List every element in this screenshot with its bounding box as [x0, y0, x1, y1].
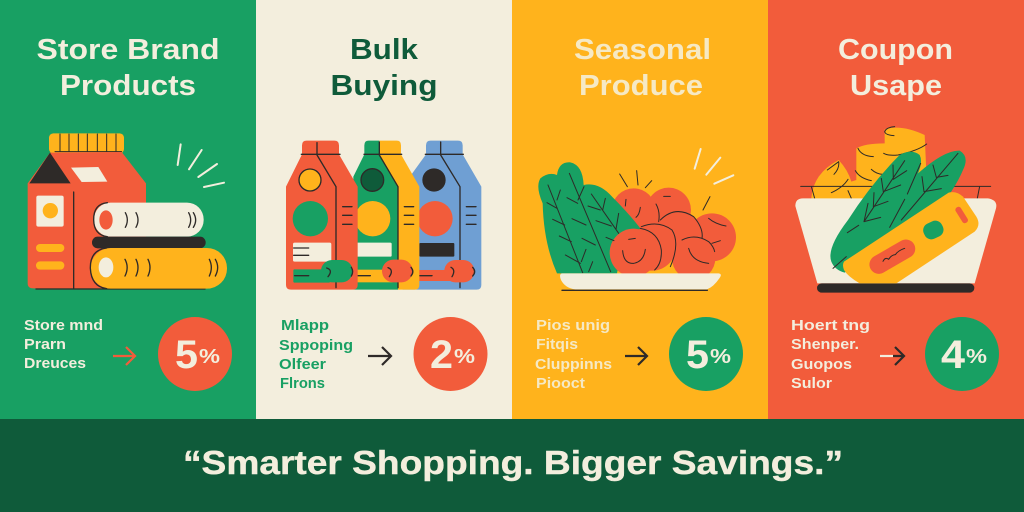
body text: seasonal produce: Cluppinns	[535, 357, 612, 373]
arrow	[625, 347, 647, 365]
panel: coupon usage	[768, 0, 1024, 419]
heading: store brand products: Products	[60, 70, 196, 102]
body text: coupon usage: Shenper.	[791, 337, 859, 353]
panel: bulk buying	[256, 0, 512, 419]
heading: store brand products	[36, 34, 220, 102]
heading: coupon usage: Usape	[850, 70, 942, 102]
red carton	[286, 141, 358, 290]
arrow	[368, 347, 391, 365]
body text: seasonal produce	[535, 318, 612, 392]
body text: store brand: Dreuces	[24, 356, 86, 372]
stat: 5%: %	[199, 346, 220, 368]
heading: seasonal produce: Seasonal	[574, 34, 711, 66]
heading: bulk buying: Bulk	[350, 34, 418, 66]
heading: seasonal produce	[574, 34, 711, 102]
stat: 5%	[158, 317, 232, 391]
body text: bulk buying: Sppoping	[279, 338, 353, 354]
heading: bulk buying	[330, 34, 438, 102]
stat: 4%: %	[966, 346, 987, 368]
stat: 5%: %	[710, 346, 731, 368]
stat: 2%: %	[454, 346, 475, 368]
body text: coupon usage: Hoert tng	[791, 318, 870, 334]
body text: coupon usage	[791, 318, 870, 392]
body text: store brand: Store mnd	[24, 318, 103, 334]
body text: store brand	[24, 318, 103, 372]
stat: 2%: 2	[430, 333, 453, 377]
icon: coupon basket	[795, 127, 996, 293]
body text: seasonal produce: Piooct	[536, 376, 585, 392]
stat: 4%	[925, 317, 999, 391]
panel: store brand products	[0, 0, 256, 419]
body text: bulk buying	[279, 318, 353, 392]
body text: coupon usage: Guopos	[791, 357, 852, 373]
stat: 2%	[414, 317, 488, 391]
footer slogan: “Smarter Shopping. Bigger Savings.”	[183, 444, 843, 481]
heading: store brand products: Store Brand	[36, 34, 220, 66]
body text: seasonal produce: Fitqis	[536, 337, 578, 353]
blue carton	[403, 141, 481, 290]
arrow	[880, 347, 904, 365]
heading: coupon usage: Coupon	[838, 34, 953, 66]
icon: carton and rolls	[28, 133, 227, 289]
body text: bulk buying: Olfeer	[279, 357, 326, 373]
green and yellow carton	[353, 141, 419, 290]
body text: store brand: Prarn	[24, 337, 66, 353]
body text: seasonal produce: Pios unig	[536, 318, 610, 334]
stat: 5%	[669, 317, 743, 391]
stat: 5%: 5	[686, 333, 709, 377]
footer banner	[0, 419, 1024, 512]
stat: 4%: 4	[941, 333, 966, 377]
body text: bulk buying: Flrons	[280, 376, 325, 392]
body text: bulk buying: Mlapp	[281, 318, 329, 334]
stat: 5%: 5	[175, 333, 198, 377]
panel: seasonal produce	[512, 0, 768, 419]
heading: coupon usage	[838, 34, 953, 102]
body text: coupon usage: Sulor	[791, 376, 832, 392]
heading: seasonal produce: Produce	[579, 70, 703, 102]
icon: produce on a plate	[538, 149, 736, 290]
heading: bulk buying: Buying	[330, 70, 438, 102]
icon: three cartons	[286, 141, 481, 290]
arrow	[113, 347, 135, 365]
